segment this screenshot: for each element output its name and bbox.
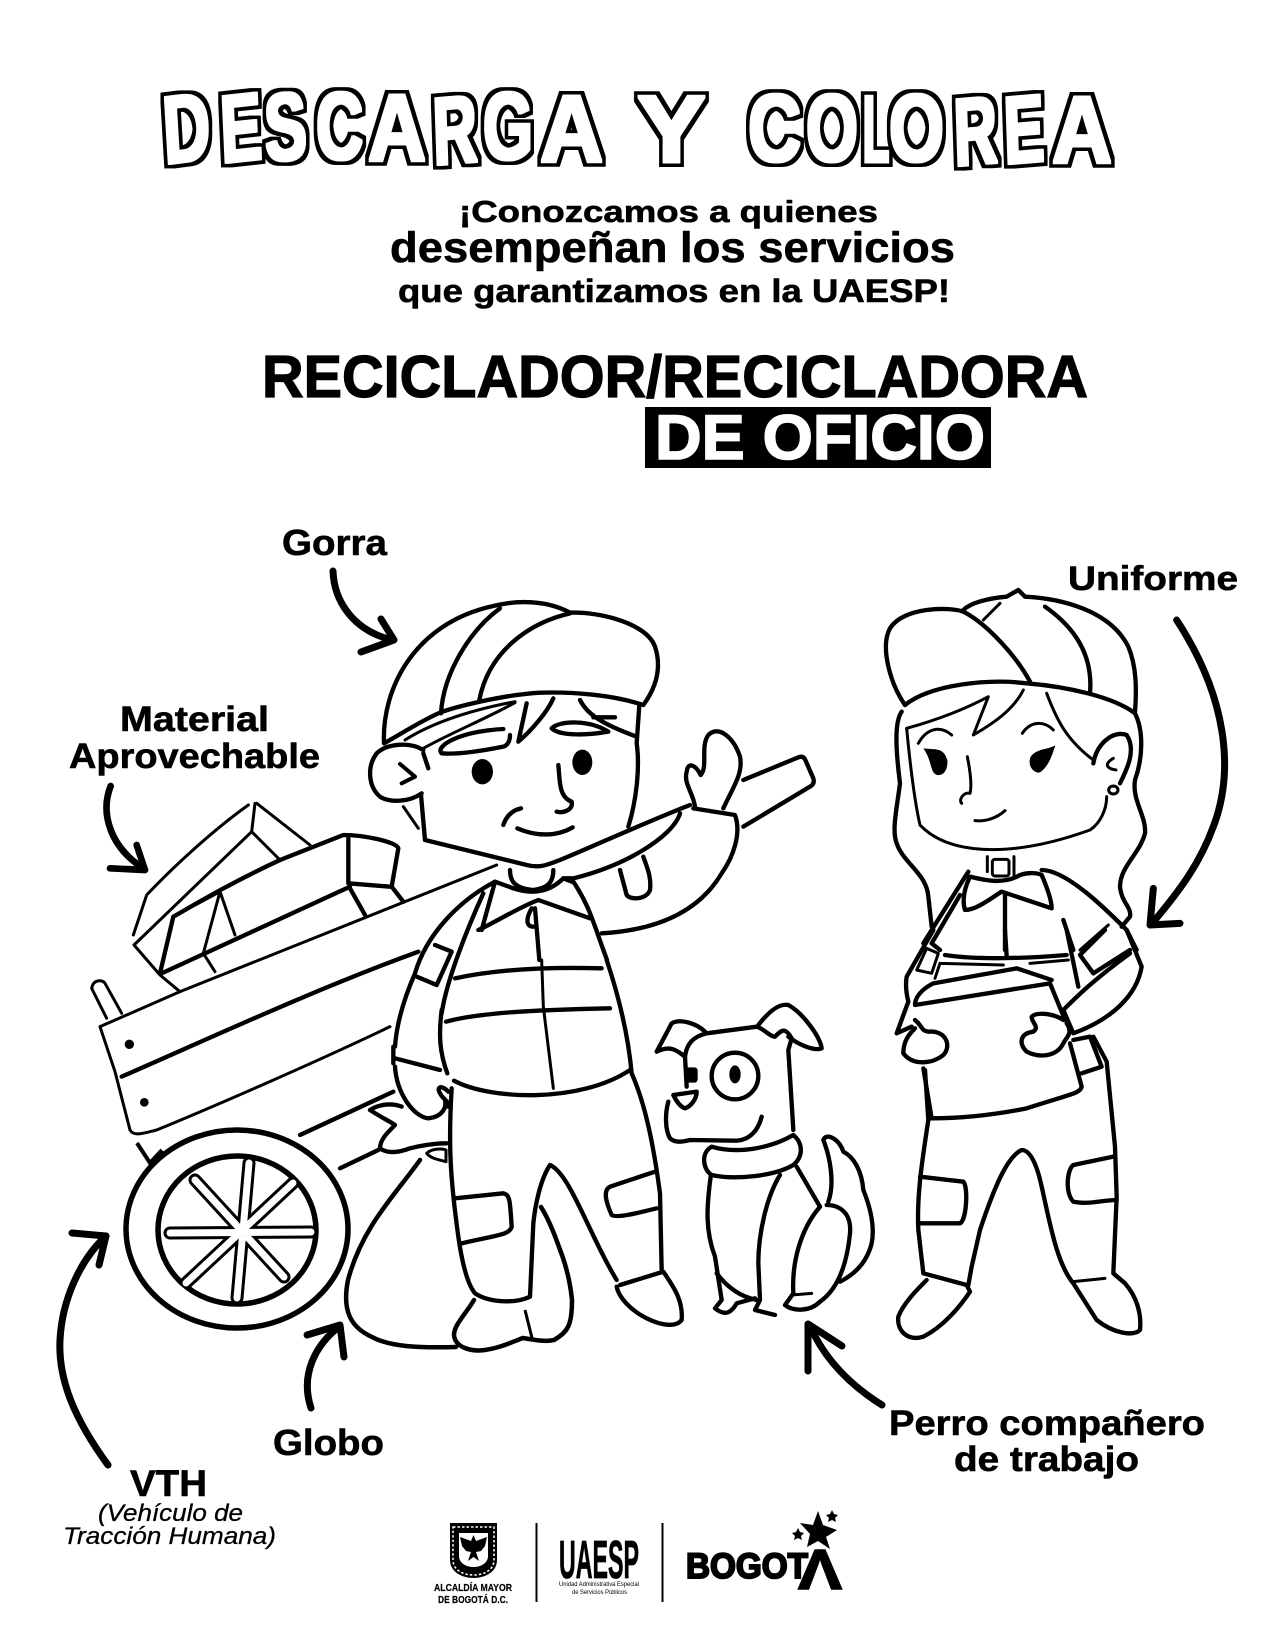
label: Perro compañero de trabajo [889,1404,1205,1479]
arrow: Uniforme [1150,620,1225,925]
intro text: desempeñan los servicios [390,224,955,272]
logo: UAESP: Unidad Administrativa Especial [559,1581,639,1588]
title: C [316,73,363,180]
arrow: VTH [60,1233,108,1465]
logo: Alcaldía Mayor: ALCALDÍA MAYOR [434,1581,512,1594]
title: R [950,78,999,187]
arrow: Perro [808,1324,882,1405]
label: VTH: Tracción Humana) [63,1523,276,1550]
illustration: wheel [126,1130,348,1328]
label: VTH: (Vehículo de [98,1500,243,1527]
title: S [260,73,309,183]
arrow: Gorra [333,571,394,652]
text: UAESP [559,1530,639,1590]
title: A [368,75,426,182]
illustration: cart body [92,865,497,1168]
label: Material Aprovechable [69,700,320,776]
label: Uniforme: Uniforme [1068,560,1238,598]
illustration: man lower body [393,960,682,1325]
divider [662,1523,664,1602]
title: Y [637,76,705,183]
logo: UAESP: de Servicios Públicos [572,1589,628,1596]
title: O [889,75,944,182]
illustration: man torso [395,870,610,1047]
illustration: dog [657,1005,873,1315]
heading: de oficio: DE OFICIO [655,403,985,473]
label: VTH: VTH [130,1463,207,1504]
logo: Bogotá [686,1510,842,1602]
title: O [806,75,858,182]
title: E [1000,76,1046,185]
intro text: ¡Conozcamos a quienes [459,194,878,229]
heading: reciclador: RECICLADOR/RECICLADORA [262,344,1088,410]
illustration: man left boot [454,1207,572,1350]
title: G [483,73,533,180]
arrow: Material [107,786,145,870]
title: D [158,74,214,185]
label: Perro compañero de trabajo: Perro compañero [889,1404,1205,1443]
title: A [540,76,601,183]
title: C [748,75,801,182]
divider [536,1523,538,1602]
label: Perro compañero de trabajo: de trabajo [954,1440,1139,1479]
label: Gorra: Gorra [282,522,388,563]
intro text: que garantizamos en la UAESP! [398,273,950,309]
label: Material Aprovechable: Aprovechable [69,737,320,776]
title: L [863,76,889,183]
logo: Bogotá: BOGOT [686,1547,808,1586]
title [158,73,1112,187]
title: E [216,74,264,184]
label: VTH [63,1463,276,1550]
logo: UAESP [559,1530,639,1596]
intro text [390,194,955,309]
logo: Alcaldía Mayor [434,1523,512,1606]
title: R [429,77,479,186]
logo: Alcaldía Mayor: DE BOGOTÁ D.C. [438,1593,508,1606]
illustration: woman head [886,590,1145,950]
illustration: woman body [897,930,1142,1338]
illustration: garbage bag [346,1104,456,1347]
logo: Bogotá: Λ [798,1538,842,1602]
arrow: Globo [307,1325,344,1408]
illustration: material pile [133,803,403,992]
illustration: recycler man head [370,602,690,866]
label: Globo: Globo [273,1422,384,1463]
title: A [1052,77,1112,184]
illustration: man raised arm and tool [563,731,814,933]
label: Material Aprovechable: Material [120,700,269,739]
